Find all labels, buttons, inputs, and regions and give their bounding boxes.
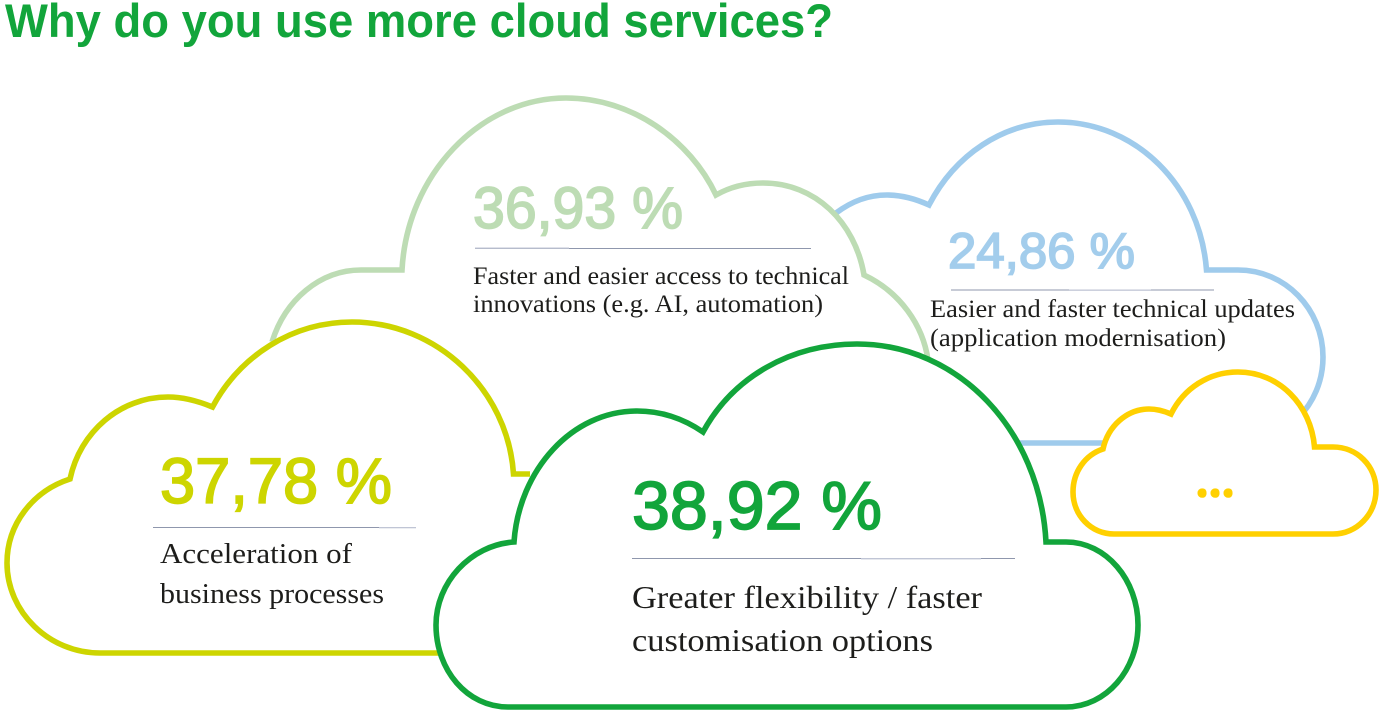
panel: light green cloud, technical innovations: [272, 98, 928, 360]
lime cloud description: Acceleration of: [160, 538, 352, 570]
panel: lime cloud, business processes: [7, 322, 530, 653]
lime cloud divider: [153, 527, 416, 528]
blue cloud percentage: 24,86 %: [948, 223, 1135, 279]
panel: green cloud, flexibility: [436, 344, 1138, 707]
light green cloud divider: [475, 248, 811, 249]
green cloud divider: [632, 558, 1015, 559]
green cloud percentage: 38,92 %: [632, 468, 882, 544]
light green cloud outline: [272, 98, 928, 360]
blue cloud divider: [951, 290, 1214, 291]
green cloud outline: [436, 344, 1138, 707]
blue cloud description: Easier and faster technical updates: [930, 296, 1295, 323]
lime cloud description: business processes: [160, 578, 384, 610]
lime cloud outline: [7, 322, 530, 653]
blue cloud description: (application modernisation): [930, 325, 1226, 352]
light green cloud description: innovations (e.g. AI, automation): [473, 291, 823, 318]
green cloud description: customisation options: [632, 622, 933, 658]
green cloud description: Greater flexibility / faster: [632, 579, 982, 615]
light green cloud description: Faster and easier access to technical: [473, 263, 849, 290]
panel: yellow cloud, other reasons: [1073, 372, 1376, 534]
yellow cloud outline: [1073, 372, 1376, 534]
yellow cloud ellipsis: ...: [1195, 451, 1235, 509]
light green cloud percentage: 36,93 %: [473, 176, 683, 241]
blue cloud outline: [836, 122, 1323, 443]
lime cloud percentage: 37,78 %: [160, 445, 392, 517]
panel: blue cloud, technical updates: [836, 122, 1323, 443]
